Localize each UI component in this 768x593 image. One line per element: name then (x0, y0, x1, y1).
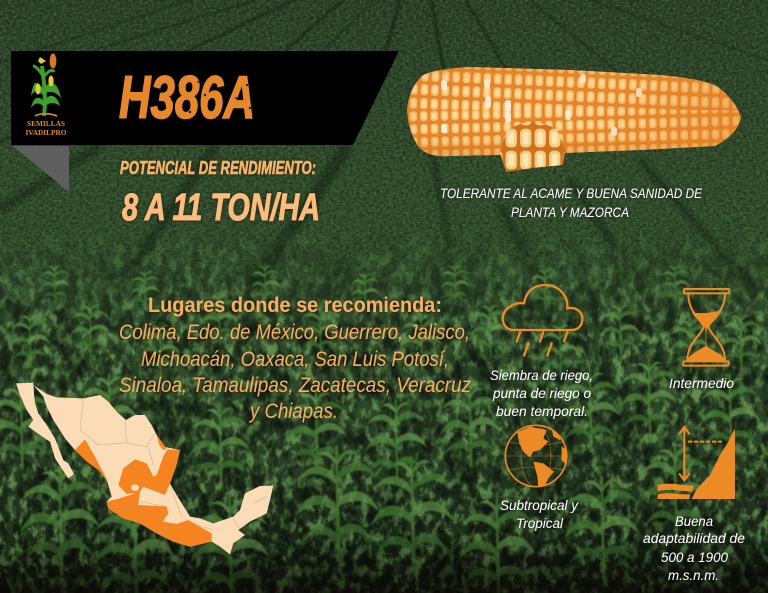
label: altitude: m.s.n.m. (668, 567, 719, 583)
logo: Semillas Ivadilpro (26, 54, 67, 137)
corn caption (440, 185, 703, 220)
label: cycle: Intermedio (669, 375, 734, 391)
label: altitude: Buena (675, 513, 713, 529)
label: altitude: 500 a 1900 (661, 549, 728, 565)
map state borders (80, 398, 267, 533)
label: altitude (643, 513, 745, 583)
recommended places text: Sinaloa, Tamaulipas, Zacatecas, Veracruz (119, 374, 471, 397)
label: climate (500, 497, 579, 531)
label: irrigation: punta de riego o (492, 385, 591, 401)
map of Mexico (16, 383, 273, 554)
corn cob illustration (407, 67, 741, 172)
icon: corn plant: IVADILPRO (26, 129, 67, 137)
yield value: 8 A 11 TON/HA (122, 187, 320, 229)
icon: globe (505, 425, 568, 488)
label: climate: Tropical (516, 515, 564, 531)
black title banner (11, 51, 399, 145)
map highlights: recommended states (75, 435, 212, 547)
icon: corn plant (26, 54, 67, 137)
recommended places text: Michoacán, Oaxaca, San Luis Potosí, (141, 348, 449, 371)
icon: rain cloud (503, 285, 582, 356)
recommended places text: Colima, Edo. de México, Guerrero, Jalisco, (119, 321, 470, 344)
yield label: POTENCIAL DE RENDIMIENTO: (120, 157, 316, 178)
label: altitude: adaptabilidad de (643, 530, 745, 546)
grey banner fold (13, 146, 69, 192)
icon: altitude (658, 427, 735, 499)
label: irrigation: Siembra de riego, (490, 367, 593, 383)
title: H386A: H386A (119, 64, 255, 131)
recommended places text: y Chiapas. (248, 400, 338, 423)
map base: whole country (16, 383, 273, 554)
label: climate: Subtropical y (500, 497, 579, 513)
recommended places text: Lugares donde se recomienda: (148, 294, 442, 317)
corn caption: PLANTA Y MAZORCA (511, 204, 629, 220)
icon: corn plant: SEMILLAS (27, 120, 65, 128)
cut cob section (500, 121, 565, 172)
label: irrigation: buen temporal. (496, 403, 588, 419)
recommended places text (119, 294, 471, 423)
corn caption: TOLERANTE AL ACAME Y BUENA SANIDAD DE (440, 185, 703, 201)
label: irrigation (490, 367, 593, 419)
icon: hourglass (683, 289, 729, 366)
